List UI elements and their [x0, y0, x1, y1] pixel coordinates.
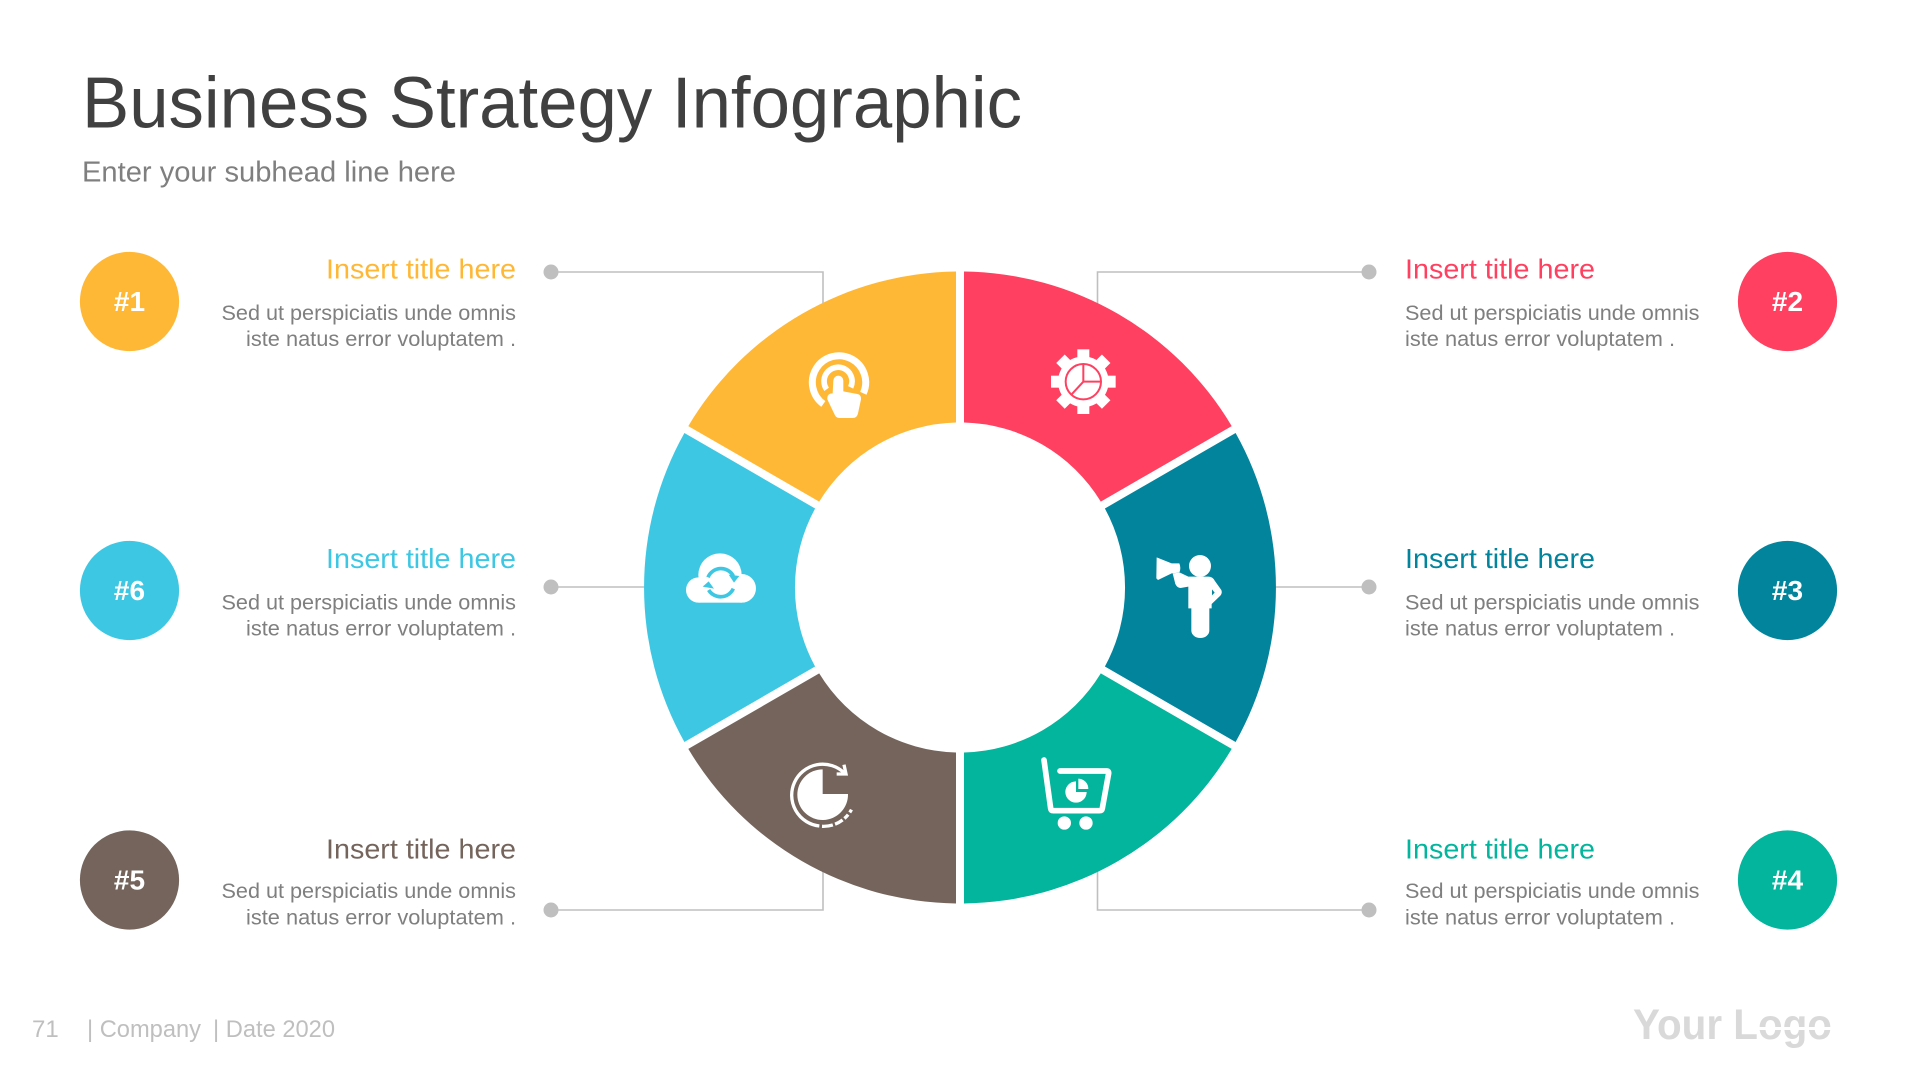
step 6 text: Sed ut perspiciatis unde omnis — [222, 590, 516, 614]
step 3 text: iste natus error voluptatem . — [1405, 616, 1675, 640]
icon: touch — [812, 356, 866, 418]
badge #1: #1 — [114, 286, 145, 317]
icon: pie with refresh arrow — [792, 764, 854, 826]
badge #5 — [80, 830, 179, 930]
step 1 text: Sed ut perspiciatis unde omnis — [222, 301, 516, 325]
badge #4: #4 — [1772, 864, 1803, 896]
step 5 text: iste natus error voluptatem . — [246, 906, 516, 930]
step 4 text: iste natus error voluptatem . — [1405, 906, 1675, 930]
segment 3 teal — [1105, 433, 1276, 742]
step 6 connector — [544, 580, 655, 594]
step 1 title: Insert title here — [326, 254, 516, 284]
step 4 connector — [1098, 835, 1376, 918]
footer: 71 — [32, 1016, 59, 1043]
step 1 text: iste natus error voluptatem . — [246, 327, 516, 351]
step 4 text — [1405, 879, 1700, 930]
badge #6 — [80, 541, 179, 640]
icon: person with megaphone — [1156, 555, 1222, 638]
panel: step 6 — [80, 541, 655, 640]
step 6 text: iste natus error voluptatem . — [246, 616, 516, 640]
panel: step 3 — [1270, 541, 1837, 640]
step 6 text — [222, 590, 516, 640]
footer — [32, 1016, 335, 1043]
step 5 title: Insert title here — [326, 834, 516, 864]
step 1 connector — [544, 264, 823, 345]
step 3 text — [1405, 590, 1700, 640]
step 2 text: iste natus error voluptatem . — [1405, 327, 1675, 351]
icon: cloud sync — [686, 553, 756, 603]
logo: Your Logo — [1633, 1001, 1832, 1049]
badge #2 — [1738, 252, 1837, 351]
step 4 title: Insert title here — [1405, 834, 1595, 864]
step 3 text: Sed ut perspiciatis unde omnis — [1405, 590, 1700, 614]
icon: gear with pie — [1051, 349, 1116, 414]
badge #5: #5 — [114, 864, 145, 896]
step 3 connector — [1270, 580, 1376, 594]
subtitle: Enter your subhead line here — [82, 156, 456, 188]
panel: step 4 — [1098, 830, 1837, 930]
title: Business Strategy Infographic — [82, 64, 1022, 144]
badge #3 — [1738, 541, 1837, 640]
step 3 title: Insert title here — [1405, 543, 1595, 574]
segment 1 yellow — [688, 272, 956, 502]
segment 6 blue — [644, 433, 815, 742]
footer: | Company — [87, 1016, 201, 1043]
segment 2 red — [964, 272, 1232, 502]
step 2 text: Sed ut perspiciatis unde omnis — [1405, 301, 1700, 325]
panel: step 2 — [1098, 252, 1837, 351]
step 1 text — [222, 301, 516, 351]
segment 4 green — [964, 673, 1232, 903]
donut chart — [644, 272, 1276, 903]
panel: step 1 — [80, 252, 823, 351]
badge #4 — [1738, 830, 1837, 930]
step 5 connector — [544, 835, 823, 918]
badge #1 — [80, 252, 179, 351]
badge #6: #6 — [114, 575, 145, 606]
footer: | Date 2020 — [213, 1016, 335, 1043]
badge #3: #3 — [1772, 575, 1803, 606]
badge #2: #2 — [1772, 286, 1803, 317]
step 5 text: Sed ut perspiciatis unde omnis — [222, 879, 516, 903]
icon: shopping cart with pie — [1044, 760, 1109, 830]
step 2 text — [1405, 301, 1700, 351]
panel: step 5 — [80, 830, 823, 930]
step 5 text — [222, 879, 516, 930]
step 4 text: Sed ut perspiciatis unde omnis — [1405, 879, 1700, 903]
segment 5 brown — [688, 673, 956, 903]
step 2 connector — [1098, 264, 1376, 345]
step 2 title: Insert title here — [1405, 254, 1595, 284]
step 6 title: Insert title here — [326, 543, 516, 574]
